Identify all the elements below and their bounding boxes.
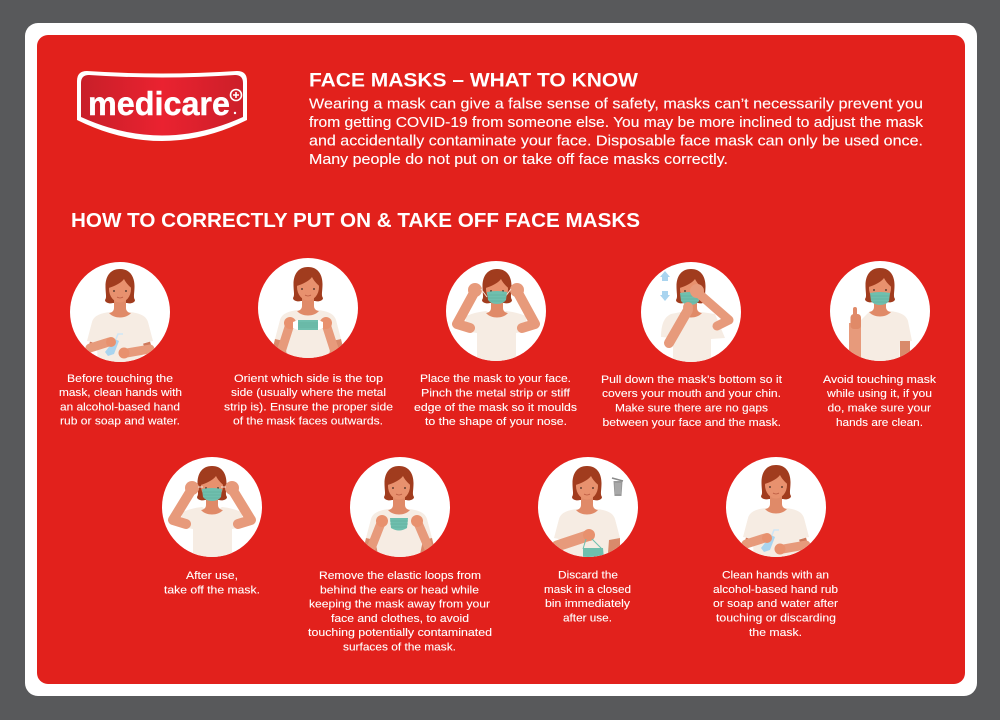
step 8 caption: bin immediately xyxy=(545,598,630,610)
step 6 caption xyxy=(164,570,260,596)
step 2 caption xyxy=(224,373,393,428)
step 9 caption: or soap and water after xyxy=(713,598,838,610)
step 9 caption xyxy=(713,570,838,639)
step 3 caption: Place the mask to your face. xyxy=(420,373,571,385)
step 5 caption xyxy=(823,374,936,429)
intro paragraph xyxy=(309,96,924,168)
logo: medicare xyxy=(77,71,247,141)
step 1 caption: an alcohol-based hand xyxy=(60,402,180,414)
icon: up arrow xyxy=(660,271,670,281)
step 3 caption xyxy=(414,373,577,428)
intro paragraph: Many people do not put on or take off face masks correctly. xyxy=(309,151,728,168)
step 7 caption: behind the ears or head while xyxy=(320,584,479,596)
step 5 caption: Avoid touching mask xyxy=(823,374,936,386)
step 7 caption: touching potentially contaminated xyxy=(308,627,492,639)
step 1 caption xyxy=(59,373,182,428)
step 4 caption: covers your mouth and your chin. xyxy=(602,388,781,400)
step 7 illustration xyxy=(350,457,450,557)
step 2 caption: of the mask faces outwards. xyxy=(233,416,383,428)
step 9 caption: touching or discarding xyxy=(716,612,836,624)
step 1 illustration xyxy=(70,262,170,372)
step 5 caption: do, make sure your xyxy=(828,402,931,414)
step 9 caption: the mask. xyxy=(749,627,802,639)
logo: medicare: medicare xyxy=(88,85,230,122)
step 7 caption: Remove the elastic loops from xyxy=(319,570,481,582)
step 9 caption: alcohol-based hand rub xyxy=(713,584,838,596)
step 2 illustration xyxy=(258,258,358,358)
step 4 illustration xyxy=(641,262,741,372)
step 3 illustration xyxy=(446,261,546,371)
step 7 caption: surfaces of the mask. xyxy=(343,642,456,654)
step 5 caption: while using it, if you xyxy=(826,388,932,400)
intro paragraph: from getting COVID-19 from someone else. You may be more inclined to adjust the mask xyxy=(309,114,924,131)
heading: what to know: FACE MASKS – WHAT TO KNOW xyxy=(309,70,638,92)
step 8 caption: mask in a closed xyxy=(544,584,631,596)
step 1 caption: rub or soap and water. xyxy=(60,416,180,428)
step 8 caption: after use. xyxy=(563,612,612,624)
step 9 illustration xyxy=(726,457,826,568)
step 2 caption: strip is). Ensure the proper side xyxy=(224,402,393,414)
step 7 caption xyxy=(308,570,492,654)
intro paragraph: and accidentally contaminate your face. Disposable face mask can only be used once. xyxy=(309,132,923,150)
step 4 caption: Make sure there are no gaps xyxy=(615,402,768,414)
step 4 caption: Pull down the mask’s bottom so it xyxy=(601,374,783,386)
step 3 caption: Pinch the metal strip or stiff xyxy=(421,388,571,400)
step 1 caption: Before touching the xyxy=(67,373,173,385)
step 3 caption: edge of the mask so it moulds xyxy=(414,402,577,414)
step 2 caption: Orient which side is the top xyxy=(234,373,383,385)
step 9 caption: Clean hands with an xyxy=(722,570,829,582)
heading: how to: HOW TO CORRECTLY PUT ON & TAKE OFF FACE MASKS xyxy=(71,209,640,232)
step 1 caption: mask, clean hands with xyxy=(59,387,182,399)
step 6 caption: After use, xyxy=(186,570,238,582)
step 8 caption: Discard the xyxy=(558,570,618,582)
intro paragraph: Wearing a mask can give a false sense of safety, masks can’t necessarily prevent you xyxy=(309,96,923,112)
step 6 illustration xyxy=(162,457,262,567)
step 3 caption: to the shape of your nose. xyxy=(425,416,567,428)
step 2 caption: side (usually where the metal xyxy=(231,387,386,399)
step 5 caption: hands are clean. xyxy=(836,417,923,429)
step 6 caption: take off the mask. xyxy=(164,584,260,596)
step 8 caption xyxy=(544,570,631,624)
step 7 caption: keeping the mask away from your xyxy=(309,598,490,610)
step 5 illustration xyxy=(830,261,930,371)
icon: trash bin xyxy=(612,478,623,496)
step 8 illustration xyxy=(538,457,638,557)
icon: down arrow xyxy=(660,291,670,301)
step 4 caption: between your face and the mask. xyxy=(602,417,781,429)
step 7 caption: face and clothes, to avoid xyxy=(331,613,469,625)
step 4 caption xyxy=(601,374,783,429)
